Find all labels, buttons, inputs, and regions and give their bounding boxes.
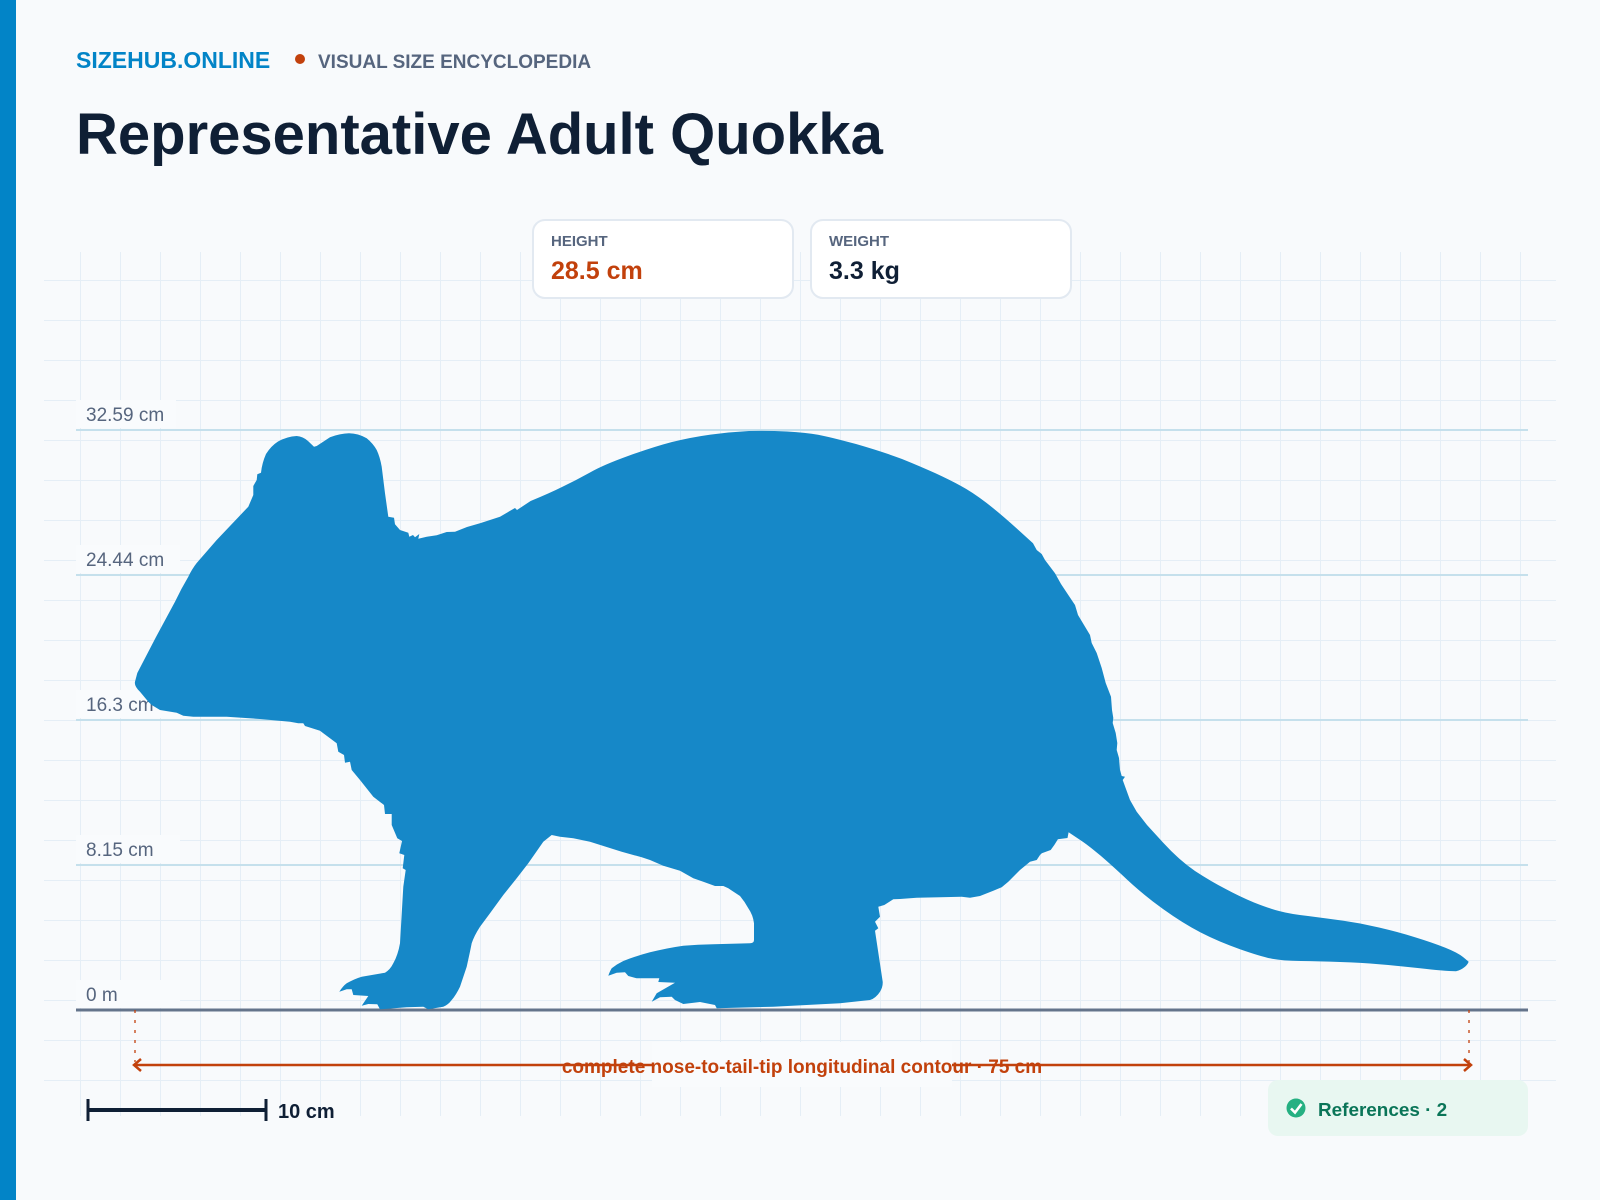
- weight label: WEIGHT: [829, 233, 889, 250]
- ruler 24.44 cm: 24.44 cm: [86, 550, 164, 571]
- references badge: [1268, 1080, 1528, 1136]
- ruler 0 m: 0 m: [86, 985, 118, 1006]
- height value: 28.5 cm: [551, 257, 643, 285]
- title: Representative Adult Quokka: [76, 102, 884, 167]
- brand tagline: VISUAL SIZE ENCYCLOPEDIA: [318, 52, 591, 73]
- ground line: [76, 1008, 1528, 1012]
- length caption: [562, 1042, 1042, 1087]
- background grid: [44, 252, 1556, 1116]
- brand dot: [295, 54, 305, 64]
- quokka silhouette: [135, 431, 1469, 1009]
- left accent bar: [0, 0, 16, 1200]
- height label: HEIGHT: [551, 233, 608, 250]
- icon: check circle: [1286, 1098, 1306, 1118]
- ruler 24.44 cm: [76, 545, 1528, 575]
- left length extent marker: [134, 1010, 136, 1062]
- ruler 8.15 cm: [76, 835, 1528, 865]
- ruler 16.3 cm: 16.3 cm: [86, 695, 154, 716]
- height card: [533, 220, 793, 298]
- ruler 8.15 cm: 8.15 cm: [86, 840, 154, 861]
- ruler 32.59 cm: [76, 400, 1528, 430]
- ruler 16.3 cm: [76, 690, 1528, 720]
- ruler 32.59 cm: 32.59 cm: [86, 405, 164, 426]
- header: [76, 47, 591, 73]
- height ruler lines and labels: [76, 400, 1528, 1008]
- weight value: 3.3 kg: [829, 257, 900, 285]
- brand name: SIZEHUB.ONLINE: [76, 47, 270, 73]
- right length extent marker: [1468, 1010, 1470, 1062]
- ruler 0 m: [76, 980, 180, 1008]
- scale label: 10 cm: [278, 1101, 335, 1123]
- length caption: complete nose-to-tail-tip longitudinal contour · 75 cm: [562, 1057, 1042, 1078]
- references text: References · 2: [1318, 1100, 1447, 1121]
- length arrow: [134, 1059, 1471, 1071]
- weight card: [811, 220, 1071, 298]
